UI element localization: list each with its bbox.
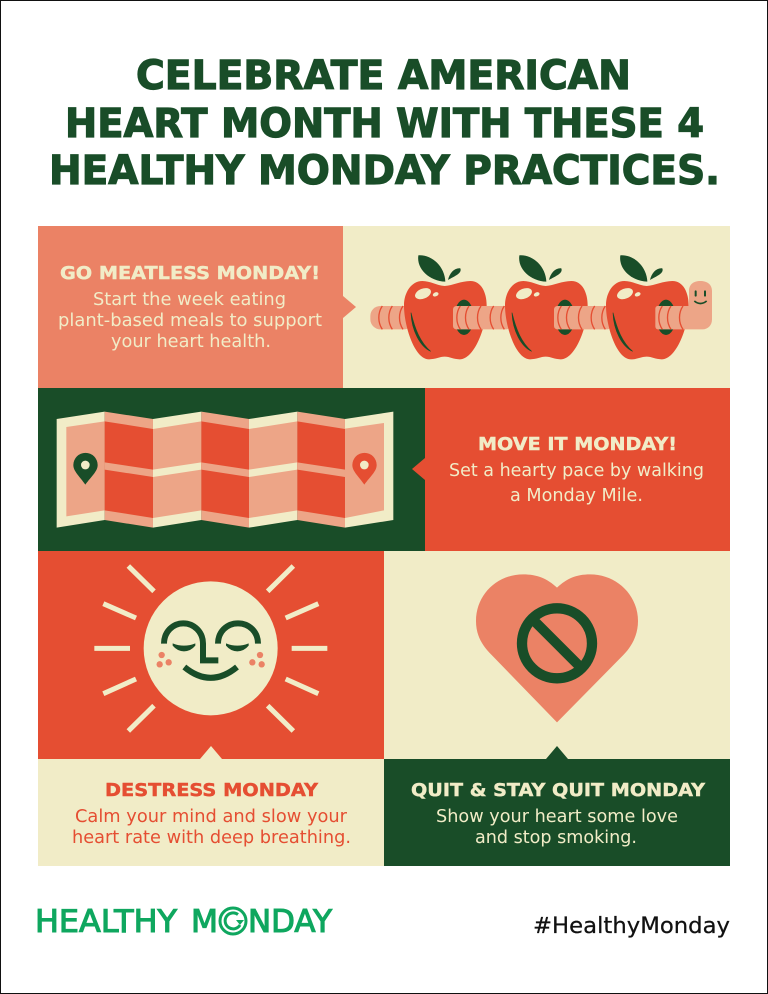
title: CELEBRATE AMERICAN [136, 53, 631, 99]
panel: destress monday: Calm your mind and slow your [75, 806, 348, 827]
logo: healthy monday [35, 904, 332, 940]
panel: move it monday: Set a hearty pace by walking [449, 460, 704, 481]
logo: healthy monday: NDAY [248, 904, 332, 940]
panel: move it monday [412, 388, 730, 551]
panel: quit and stay quit monday: Show your heart some love [436, 806, 678, 827]
panel: go meatless monday [38, 226, 356, 388]
logo: healthy monday: M [191, 904, 218, 940]
panel: destress monday [38, 746, 384, 866]
panel: sun background [38, 551, 384, 759]
panel: go meatless monday: Start the week eating [93, 289, 286, 310]
panel: destress monday: heart rate with deep breathing. [72, 827, 351, 848]
panel: heart background [384, 551, 730, 759]
panel: map background [38, 388, 425, 551]
title: HEART MONTH WITH THESE 4 [65, 101, 704, 147]
title [49, 53, 720, 194]
panel: go meatless monday illustration background [343, 226, 730, 388]
illustration: smiling sun [94, 566, 327, 731]
panel: quit and stay quit monday: QUIT & STAY QUIT MONDAY [411, 780, 706, 801]
panel: move it monday: MOVE IT MONDAY! [478, 434, 677, 455]
panel: quit and stay quit monday: and stop smoking. [475, 827, 637, 848]
panel: go meatless monday: your heart health. [111, 331, 271, 352]
illustration: apples with worm [370, 255, 712, 359]
panel: go meatless monday: plant-based meals to support [58, 310, 322, 331]
panel: move it monday: a Monday Mile. [510, 485, 643, 506]
panel: quit and stay quit monday [384, 746, 730, 866]
illustration: heart with no-smoking sign [476, 574, 638, 722]
panel: destress monday: DESTRESS MONDAY [105, 780, 319, 801]
panel: go meatless monday: GO MEATLESS MONDAY! [60, 263, 320, 284]
title: HEALTHY MONDAY PRACTICES. [49, 148, 720, 194]
logo: healthy monday: HEALTHY [35, 904, 177, 940]
illustration: folded map [57, 412, 393, 528]
hashtag: #HealthyMonday [533, 914, 730, 939]
